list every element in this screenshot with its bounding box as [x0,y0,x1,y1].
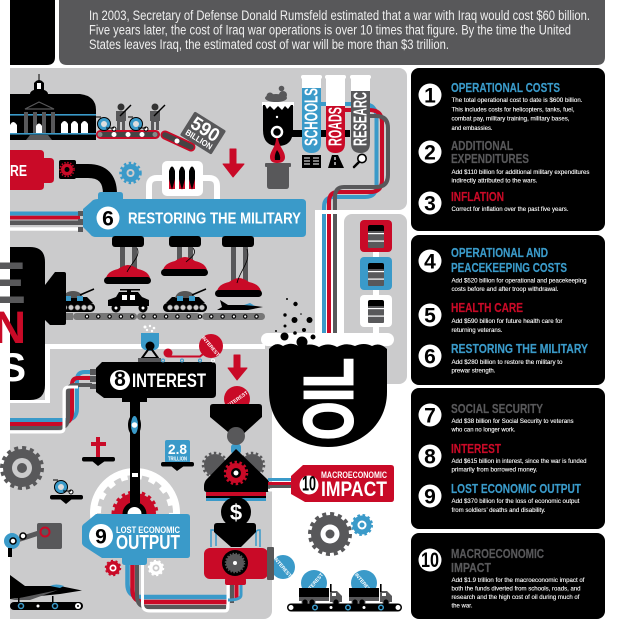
panel: black machine with letters: S [0,346,26,390]
lever: interest ball [164,334,223,358]
panel: costs 4 to 6: costs before and after troop withdrawal. [452,286,559,293]
panel: cost 10: Add $1.9 trillion for the macroeconomic impact of [452,577,585,584]
icon: robot arm [4,523,62,557]
label: 6 restoring the military: RESTORING THE MILITARY [128,211,301,228]
icon: magnifier [354,154,366,167]
pipe: black with red gear [59,160,110,194]
panel: costs 4 to 6: prewar strength. [452,368,496,374]
icon: 2.8 trillion [161,440,194,471]
panel: costs 7 to 9: who can no longer work. [451,426,516,434]
panel: costs 4 to 6: PEACEKEEPING COSTS [451,260,567,275]
panel: cost 10: IMPACT [451,560,491,575]
label: 6 restoring the military: 6 [102,208,114,230]
icon: 2.8 trillion: 2.8 [168,441,187,457]
icon: interest ball 2: INTEREST [226,390,249,409]
icon: book [302,155,321,168]
pipes: bottom [128,556,241,611]
panel: costs 7 to 9: 9 [424,486,436,508]
panel: costs 7 to 9 [411,388,605,529]
pipes: into restoring the military [10,211,83,232]
icon: tank 1 [51,289,95,312]
panel: costs 4 to 6: Add $590 billion for future health care for [452,318,563,325]
test tube: roads: ROADS [326,107,346,146]
icon: jet [217,300,263,310]
label: 10 macroeconomic impact: IMPACT [321,478,387,501]
label: 8 interest: INTEREST [132,371,206,392]
icon: dollar [221,497,251,527]
bubbles [275,298,316,348]
icon: blue interest ball: INTEREST [272,556,292,579]
icon: flask over flame [262,86,350,189]
panel: cost 10: the war. [452,602,473,610]
icon: grey gear left [2,448,42,488]
panel: costs 7 to 9: SOCIAL SECURITY [451,401,543,416]
label: 9 lost economic output [82,514,190,565]
panel: cost 10: 10 [421,549,439,572]
tag: 590 billion: 590 [187,113,223,147]
test tube: research: RESEARC [350,92,370,146]
label: 10 macroeconomic impact [291,465,394,502]
panel: bins [360,220,392,335]
panel: introduction: States leaves Iraq, the estimated cost of war will be more than $3 trillion. [89,37,449,52]
icon: grey gear right [310,514,350,554]
panel: costs 1 to 3: 3 [424,192,436,216]
gear mechanism: lost output [94,398,176,554]
panel: costs 7 to 9: from soldiers’ deaths and disability. [452,507,546,514]
label: 9 lost economic output: OUTPUT [116,532,180,554]
conveyor: veterans [96,104,191,147]
vat: oil: OIL [290,358,368,440]
panel: costs 7 to 9: 8 [424,446,436,468]
panel: costs 1 to 3: Add $110 billion for additional military expenditures [452,169,590,176]
icon: interest ball 2 [224,386,250,412]
panel: costs 4 to 6: Add $280 billion to restore the military to [452,359,563,366]
panel: cost 10: both the funds diverted from schools, roads, and [452,586,581,592]
conveyor: vehicles [64,313,265,320]
conveyor: trucks: INTEREST [305,572,325,595]
pipes: into interest [10,372,92,432]
machine: three presses [104,236,262,297]
icon: road [328,155,344,168]
panel: introduction [59,0,605,65]
panel: costs 4 to 6: 5 [424,304,436,328]
panel: costs 1 to 3: EXPENDITURES [451,151,529,166]
pipes: to macroeconomic impact [268,478,292,492]
panel: costs 7 to 9: Add $615 billion in interest, since the war is funded [452,458,587,465]
panel: costs 4 to 6: returning veterans. [452,327,503,334]
icon: cross on shelf [82,437,115,466]
panel: costs 4 to 6: 6 [424,346,436,368]
icon: humvee [108,289,149,312]
tag: 590 billion: BILLION [184,127,214,152]
vat: oil [261,333,394,447]
machine: macro funnel [203,404,270,501]
panel: costs 1 to 3: indirectly attributed to the wars. [452,178,538,184]
panel: cost 10: research and the high cost of oil during much of [452,594,580,601]
tag: 590 billion [180,111,226,155]
panel: costs 4 to 6: Add $520 billion for operational and peacekeeping [452,278,587,284]
label: 10 macroeconomic impact: MACROECONOMIC [321,470,387,480]
panel: costs 7 to 9: Add $370 billion for the loss of economic output [452,498,580,505]
icon: 2.8 trillion: TRILLION [168,456,187,462]
panel: costs 7 to 9: 7 [424,404,436,428]
panel: costs 7 to 9: INTEREST [451,441,501,456]
panel: costs 4 to 6: OPERATIONAL AND [451,245,548,260]
panel: costs 1 to 3: and embassies. [452,125,493,132]
panel: costs 4 to 6: 4 [424,250,436,274]
machine: lower funnel and red press [204,523,274,585]
panel: cost 10: MACROECONOMIC [451,546,544,561]
icon: wheelchair on shelf [50,480,83,504]
panel: costs 1 to 3: This includes costs for helicopters, tanks, fuel, [452,106,575,114]
icon: tank 2 [163,289,207,312]
panel: costs 1 to 3: Correct for inflation over the past five years. [452,206,569,213]
panel: costs 7 to 9: Add $38 billion for Social Security to veterans [452,418,574,425]
arrow: down 2 [228,355,247,380]
panel: costs 1 to 3: ADDITIONAL [451,138,513,153]
label: 10 macroeconomic impact: 10 [302,472,316,496]
label: 8 interest: 8 [114,368,126,391]
panel: costs 1 to 3: The total operational cost to date is $600 billion. [452,97,583,104]
label: health care stub: RE [10,163,27,180]
panel: costs 1 to 3: combat pay, military training, military bases, [452,116,570,122]
panel: main grey background [10,68,407,619]
lever: interest ball: INTEREST [200,335,220,358]
panel: costs 1 to 3: 1 [424,84,436,108]
panel: costs 7 to 9: LOST ECONOMIC OUTPUT [451,481,581,496]
icon: blue gear [120,163,140,183]
test tube: schools: SCHOOLS [302,88,322,146]
label: health care stub [10,150,54,190]
conveyor: trucks [287,570,402,612]
panel: costs 7 to 9: primarily from borrowed money. [452,466,538,474]
label: 9 lost economic output: LOST ECONOMIC [116,525,180,536]
arrow: down [223,149,244,177]
panel: black machine with letters [0,247,66,400]
icon: dollar: $ [230,500,242,525]
icon: blue gear right [352,516,372,534]
panel: costs 1 to 3: INFLATION [451,189,504,204]
icon: small red gear [106,561,120,575]
label: 8 interest [90,359,216,402]
icon: interest still [138,325,161,362]
icon: rockets [149,161,217,200]
icon: jet on conveyor [10,575,83,610]
conveyor: trucks: INTEREST [353,572,373,595]
pipes: from test tubes to oil [315,104,388,336]
panel: costs 4 to 6: RESTORING THE MILITARY [451,341,588,356]
panel: costs 1 to 3: 2 [424,142,436,164]
panel: costs 1 to 3: OPERATIONAL COSTS [451,80,560,95]
label: 9 lost economic output: 9 [95,526,107,548]
label: 6 restoring the military [83,192,306,237]
panel: costs 1 to 3 [411,68,605,231]
panel: black corner box [10,0,55,65]
icon: small white gear [149,561,163,575]
panel: cost 10 [411,533,605,619]
panel: costs 4 to 6: HEALTH CARE [451,300,523,315]
icon: capitol building [10,74,96,140]
panel: costs 4 to 6 [411,235,605,385]
